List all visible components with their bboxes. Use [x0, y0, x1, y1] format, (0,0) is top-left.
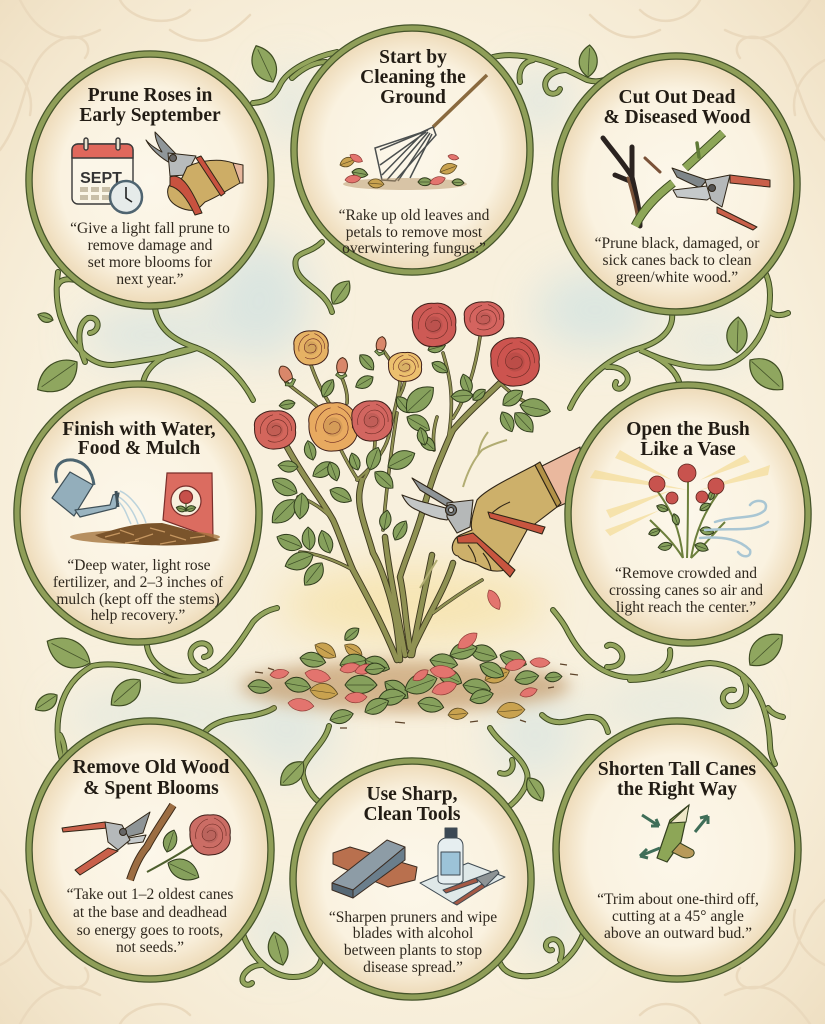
quote: crossing canes so air and: [609, 582, 763, 599]
heading: Ground: [380, 87, 446, 108]
quote: green/white wood.”: [616, 269, 738, 286]
panel: use sharp, clean tools: [293, 761, 531, 997]
heading: Cut Out Dead: [618, 87, 736, 108]
icon: calendar and clock: [72, 138, 142, 213]
quote: between plants to stop: [344, 942, 482, 959]
heading: Remove Old Wood: [73, 757, 230, 778]
quote: mulch (kept off the stems): [56, 591, 220, 608]
quote: “Take out 1–2 oldest canes: [67, 886, 233, 903]
panel: finish with water, food and mulch: [17, 384, 259, 642]
panel: remove old wood and spent blooms: [29, 721, 271, 979]
heading: Early September: [79, 105, 221, 126]
quote: help recovery.”: [91, 607, 185, 624]
quote: at the base and deadhead: [73, 904, 227, 921]
quote: set more blooms for: [88, 254, 213, 271]
heading: Open the Bush: [626, 419, 750, 440]
panel: prune roses in early September: [29, 54, 271, 306]
soil and fallen leaves: [240, 624, 578, 728]
quote: sick canes back to clean: [603, 252, 752, 269]
quote: blades with alcohol: [353, 925, 473, 942]
quote: “Trim about one-third off,: [597, 891, 759, 908]
icon: open rose bush with sun and wind: [590, 450, 770, 558]
quote: “Remove crowded and: [615, 565, 757, 582]
icon: dead cane and shears: [603, 133, 770, 230]
heading: Clean Tools: [364, 804, 461, 825]
icon: calendar and clock: SEPT: [80, 170, 122, 187]
quote: “Deep water, light rose: [67, 557, 211, 574]
quote: next year.”: [116, 271, 184, 288]
quote: overwintering fungus.”: [342, 240, 486, 257]
heading: Finish with Water,: [62, 419, 216, 440]
quote: disease spread.”: [363, 959, 463, 976]
panel: cut out dead and diseased wood: [555, 56, 797, 312]
quote: cutting at a 45° angle: [612, 908, 744, 925]
heading: the Right Way: [617, 779, 737, 800]
quote: “Give a light fall prune to: [70, 220, 230, 237]
heading: Food & Mulch: [78, 438, 200, 459]
quote: fertilizer, and 2–3 inches of: [53, 574, 224, 591]
heading: & Spent Blooms: [83, 778, 219, 799]
icon: pruners, cane and rose: [62, 805, 230, 885]
quote: “Sharpen pruners and wipe: [329, 909, 497, 926]
panel: start by cleaning the ground: [294, 28, 530, 272]
quote: light reach the center.”: [616, 599, 756, 616]
panel: shorten tall canes the right way: [556, 721, 798, 979]
icon: gloved hand with pruners: [146, 132, 243, 215]
stems: [286, 337, 548, 660]
icon: cane cut at 45 degrees with arrows: [640, 805, 708, 862]
heading: Shorten Tall Canes: [598, 759, 757, 780]
quote: “Rake up old leaves and: [339, 207, 490, 224]
icon: alcohol bottle, cloth and pruners: [420, 828, 505, 905]
quote: petals to remove most: [346, 224, 483, 241]
foliage: [266, 340, 552, 590]
heading: Prune Roses in: [88, 85, 212, 106]
quote: remove damage and: [88, 237, 213, 254]
quote: not seeds.”: [116, 939, 184, 956]
falling petal: [485, 588, 503, 612]
heading: Use Sharp,: [366, 784, 458, 805]
gloved hand with pruning shears: [402, 447, 580, 577]
quote: above an outward bud.”: [604, 925, 752, 942]
panel: open the bush like a vase: [568, 385, 808, 643]
central rose bush illustration: [240, 302, 580, 728]
heading: Cleaning the: [360, 67, 466, 88]
heading: & Diseased Wood: [604, 107, 751, 128]
quote: “Prune black, damaged, or: [595, 235, 760, 252]
icon: rake and leaves: [338, 75, 487, 190]
quote: so energy goes to roots,: [77, 922, 223, 939]
heading: Like a Vase: [640, 439, 736, 460]
icon: watering can: [52, 460, 146, 524]
heading: Start by: [379, 47, 447, 68]
icon: whetstones: [332, 840, 417, 898]
icon: fertilizer bag: [163, 473, 213, 538]
icon: mulch pile: [70, 523, 220, 545]
roses and buds: [254, 302, 539, 451]
